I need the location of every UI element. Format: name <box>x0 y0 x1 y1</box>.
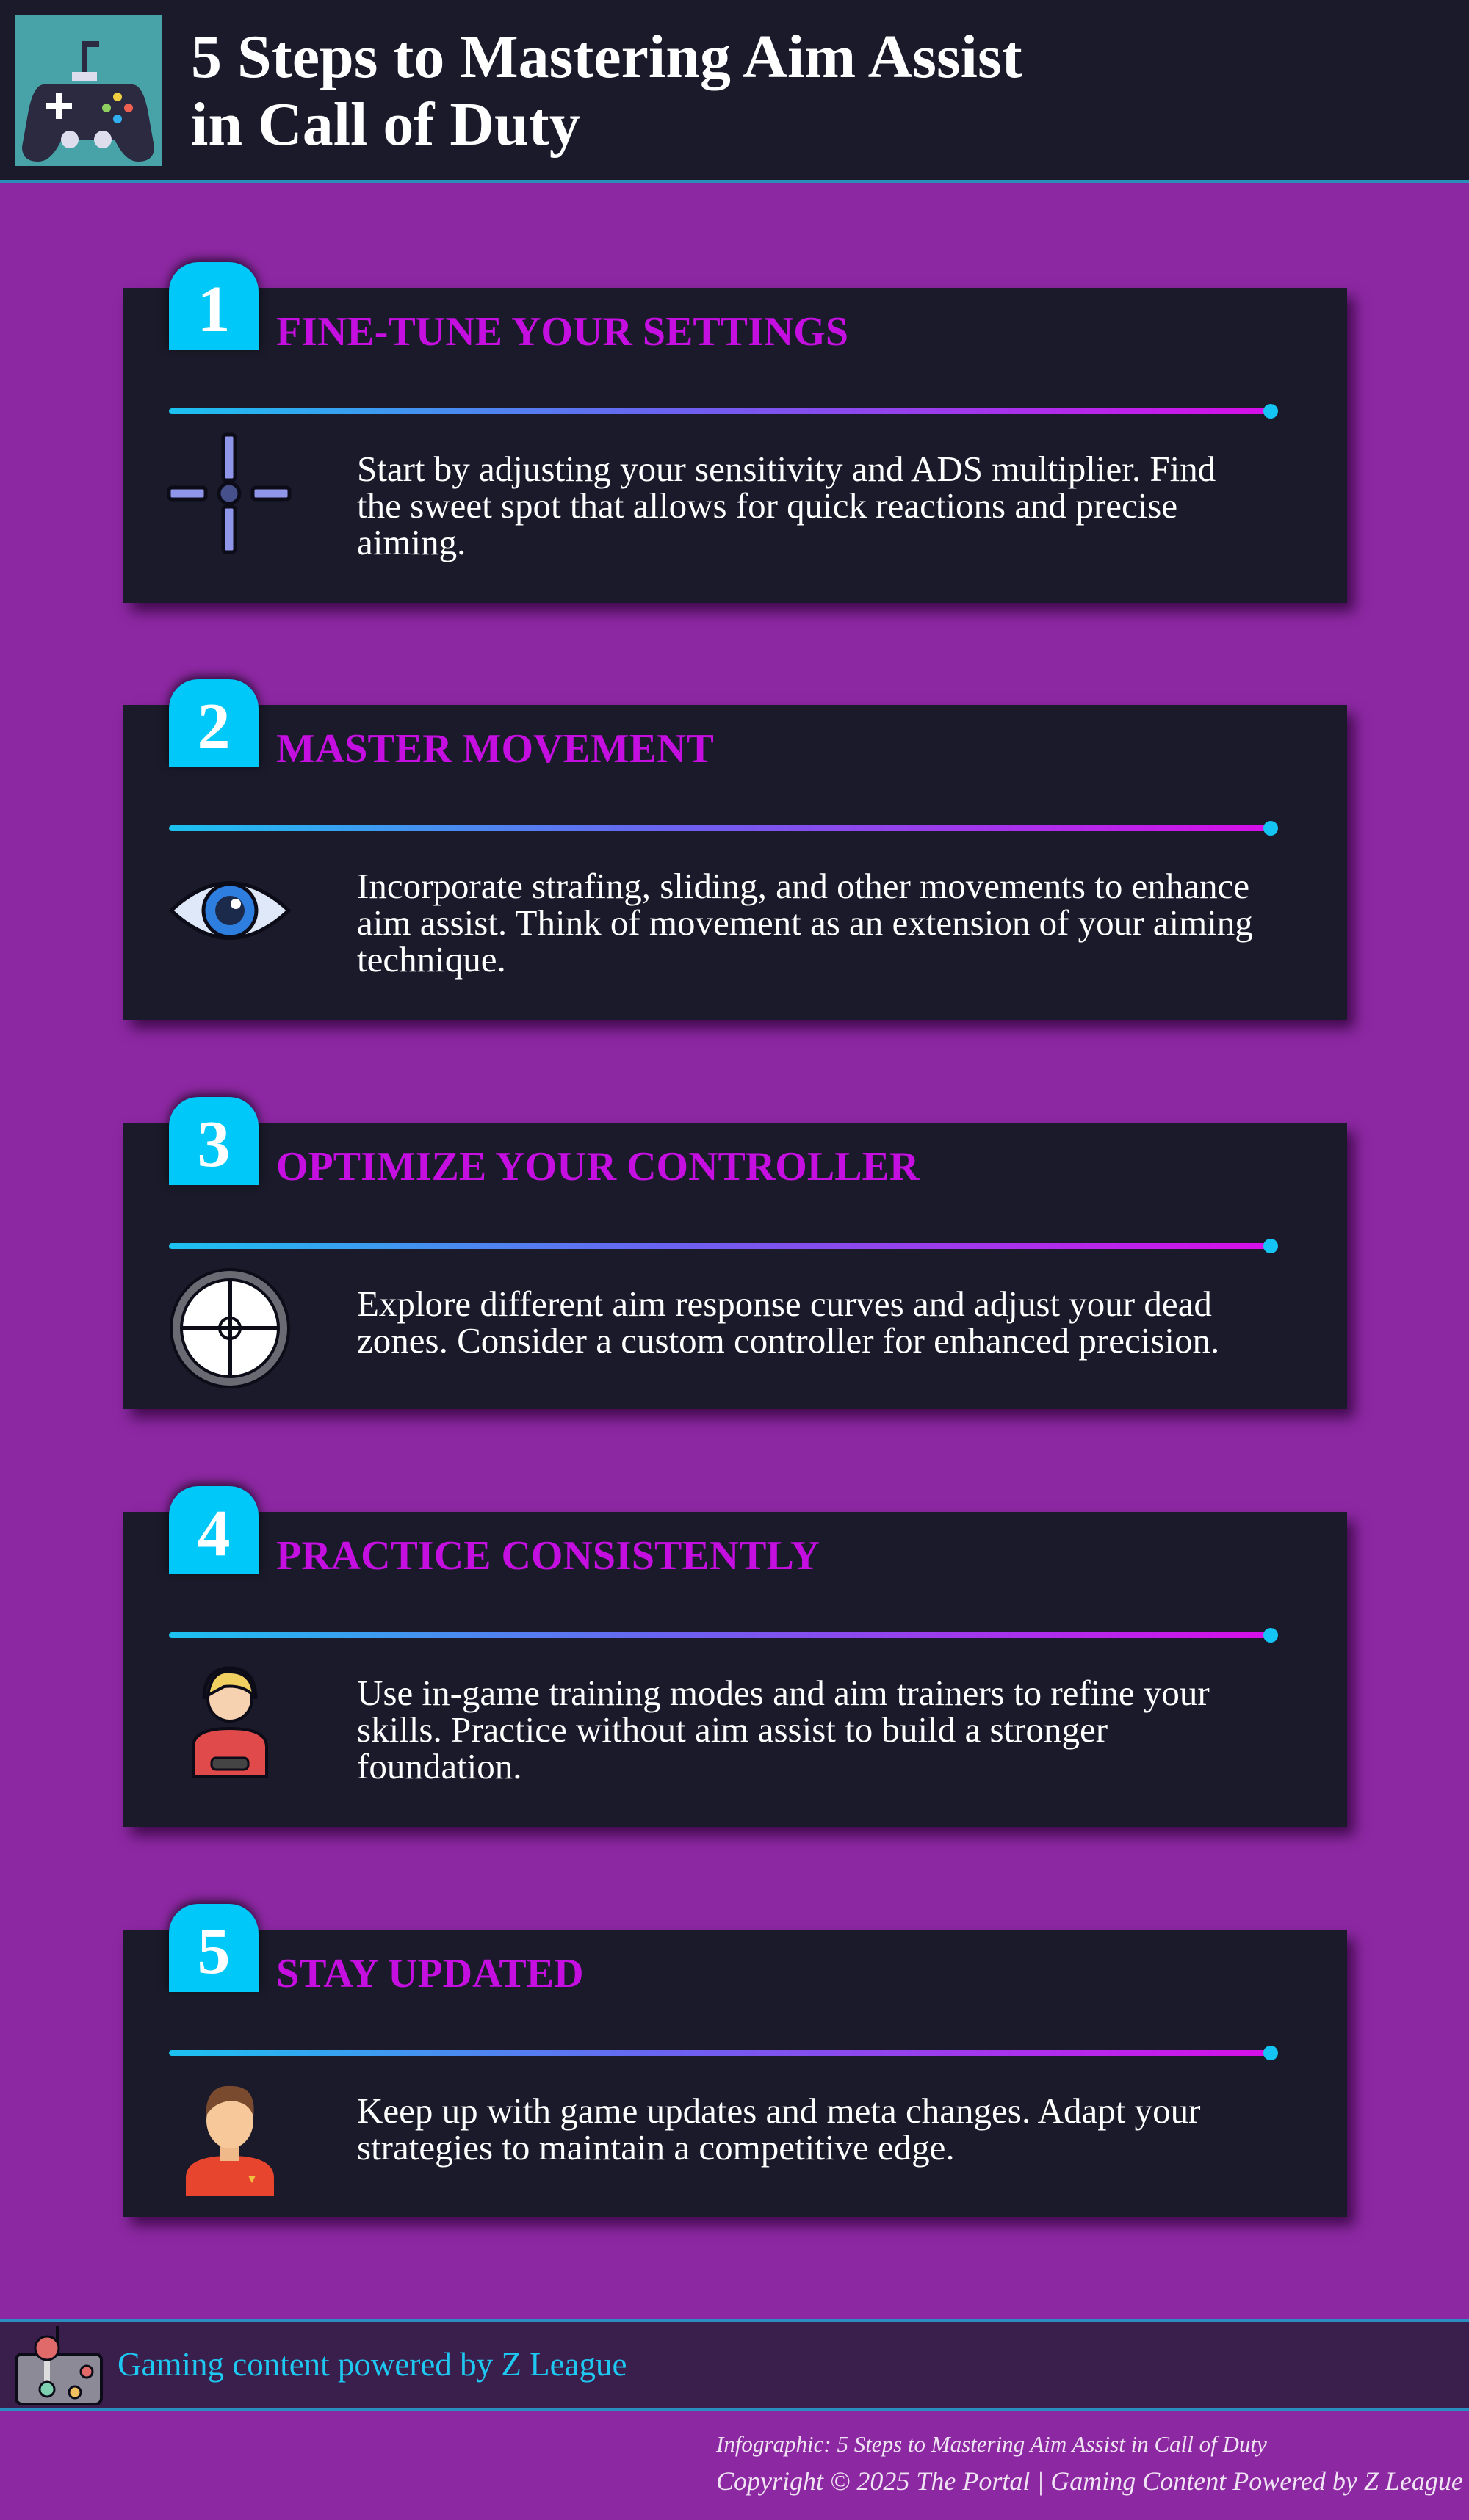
icon: dpad <box>167 433 291 554</box>
text 3 <box>357 1283 1219 1361</box>
title: 5 Steps to Mastering Aim Assist <box>191 23 1022 91</box>
text 2 <box>357 866 1253 980</box>
heading 3: OPTIMIZE YOUR CONTROLLER <box>276 1144 919 1190</box>
footer text: Gaming content powered by Z League <box>118 2346 627 2383</box>
text 5: Keep up with game updates and meta changes. Adapt your <box>357 2090 1200 2131</box>
icon: crosshair <box>170 1268 290 1388</box>
text 5 <box>357 2090 1200 2168</box>
text 2: Incorporate strafing, sliding, and other movements to enhance <box>357 866 1249 906</box>
panel: step 5 <box>123 1930 1347 2217</box>
heading 5: STAY UPDATED <box>276 1951 584 1996</box>
badge 4: 4 <box>197 1497 231 1570</box>
text 3: zones. Consider a custom controller for enhanced precision. <box>357 1320 1219 1361</box>
badge 2 <box>169 679 259 767</box>
credits <box>715 2431 1463 2496</box>
panel: step 4 <box>123 1512 1347 1827</box>
text 4: Use in-game training modes and aim trainers to refine your <box>357 1673 1210 1713</box>
heading 2: MASTER MOVEMENT <box>276 726 714 772</box>
badge 3 <box>169 1097 259 1185</box>
panel: step 2 <box>123 705 1347 1020</box>
title: in Call of Duty <box>191 90 580 159</box>
text 4 <box>357 1673 1210 1786</box>
heading 4: PRACTICE CONSISTENTLY <box>276 1533 820 1579</box>
heading 1: FINE-TUNE YOUR SETTINGS <box>276 309 848 355</box>
header <box>0 0 1469 183</box>
footer band <box>0 2319 1469 2411</box>
credits: Copyright © 2025 The Portal | Gaming Content Powered by Z League <box>716 2466 1463 2496</box>
text 1: the sweet spot that allows for quick reactions and precise <box>357 485 1177 526</box>
text 1: aiming. <box>357 522 466 562</box>
badge 3: 3 <box>197 1108 231 1181</box>
text 2: technique. <box>357 939 506 980</box>
panel: step 3 <box>123 1123 1347 1409</box>
icon: player <box>186 2085 274 2196</box>
text 5: strategies to maintain a competitive edge. <box>357 2127 955 2168</box>
credits: Infographic: 5 Steps to Mastering Aim Assist in Call of Duty <box>716 2431 1267 2457</box>
title <box>191 23 1022 159</box>
text 3: Explore different aim response curves and adjust your dead <box>357 1283 1212 1324</box>
text 1: Start by adjusting your sensitivity and ADS multiplier. Find <box>357 449 1216 489</box>
text 1 <box>357 449 1216 562</box>
panel: step 1 <box>123 288 1347 603</box>
text 2: aim assist. Think of movement as an extension of your aiming <box>357 902 1253 943</box>
icon: gamer <box>192 1667 268 1778</box>
badge 5 <box>169 1904 259 1992</box>
icon: gamepad <box>15 15 162 166</box>
icon: eye <box>169 881 291 940</box>
text 4: skills. Practice without aim assist to build a stronger <box>357 1709 1108 1750</box>
icon: joystick <box>15 2326 103 2405</box>
text 4: foundation. <box>357 1746 522 1786</box>
badge 5: 5 <box>197 1915 231 1988</box>
badge 1: 1 <box>197 273 231 346</box>
badge 4 <box>169 1486 259 1574</box>
badge 1 <box>169 262 259 350</box>
badge 2: 2 <box>197 690 231 763</box>
